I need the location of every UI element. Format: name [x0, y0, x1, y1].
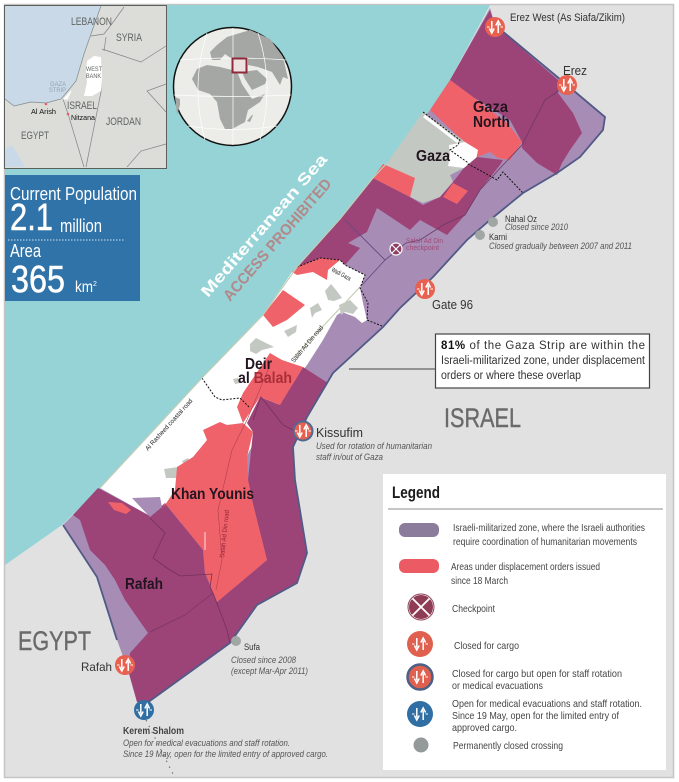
crossing: Kerem Shalom: Open for medical evacuations and staff rotation. [123, 738, 290, 748]
crossing: Karni [475, 230, 632, 251]
callout: 81 percent [436, 334, 650, 388]
panel background [5, 175, 140, 301]
sea: Mediterranean [5, 5, 490, 565]
crossing: Kerem Shalom: Since 19 May, open for the limited entry of approved cargo. [123, 749, 328, 759]
crossing: Kissufim: staff in/out of Gaza [316, 452, 383, 462]
crossing: Sufa: Sufa [244, 642, 260, 652]
legend item: permanently closed: Permanently closed crossing [453, 740, 563, 752]
line: coast edge [100, 163, 387, 488]
legend item: checkpoint [408, 594, 495, 620]
line: road Salah Ad Din [406, 90, 560, 243]
legend item: open for evacuations [407, 698, 642, 734]
inset borders [63, 7, 166, 167]
area: white band along Gaza boundary [424, 116, 458, 142]
crossing: Karni: Closed gradually between 2007 and 2011 [489, 241, 632, 251]
globe graticule [174, 28, 291, 145]
name: Gaza: Gaza [416, 148, 450, 165]
zone: overlap south [73, 367, 328, 703]
legend heading: Legend [392, 483, 440, 502]
inset coast [5, 6, 101, 106]
legend rule [388, 508, 663, 510]
line: west border fence [63, 525, 117, 640]
inset towns: Al Arish [31, 107, 56, 116]
crossing: Karni: Karni [489, 232, 507, 242]
inset labels: EGYPT [21, 130, 49, 142]
country label: Israel: ISRAEL [444, 403, 521, 433]
area figures: 365 [11, 259, 65, 301]
globe locator [174, 28, 292, 146]
line: governorate dashed boundaries [202, 112, 523, 408]
legend item: displacement orders [399, 559, 600, 587]
inset labels: LEBANON [71, 16, 112, 28]
crossing: Erez West [485, 12, 625, 37]
legend item: closed for cargo, open for staff [408, 664, 622, 692]
legend item: open for evacuations: Since 19 May, open for the limited entry of [452, 710, 619, 722]
checkpoint: Salah Ad Din: Salah Ad Din [406, 238, 443, 245]
globe land [175, 30, 288, 129]
crossing: Rafah: Rafah [81, 660, 112, 674]
checkpoint: Salah Ad Din: checkpoint [406, 245, 439, 252]
divider [8, 239, 125, 241]
zone: displacement Deir al Balah north [263, 290, 305, 327]
line: central governorate boundary [253, 397, 293, 430]
crossing: Kissufim: Used for rotation of humanitarian [316, 441, 432, 451]
zone: displacement Khan Younis and Deir al Balah [163, 353, 303, 602]
inset lower sea [5, 145, 25, 167]
dotted leader: Kerem Shalom [146, 720, 174, 776]
legend item: checkpoint: Checkpoint [452, 603, 495, 615]
road: Al Rasheed: Al Rasheed coastal road [144, 398, 195, 452]
inset labels [21, 16, 143, 142]
inset labels: JORDAN [106, 116, 141, 128]
inset towns [31, 103, 96, 122]
name: Gaza North: Gaza [473, 99, 508, 116]
road labels [144, 267, 352, 558]
governorate names [125, 99, 510, 593]
zone: Israeli-militarized base [63, 8, 605, 703]
crossing: Erez West: Erez West (As Siafa/Zikim) [510, 12, 625, 24]
road: Wadi Gaza: Wadi Gaza [330, 267, 352, 283]
crossing: Rafah [81, 655, 135, 675]
zone: displacement north [430, 80, 522, 160]
inset land [4, 6, 166, 168]
inset label: Gaza Strip: GAZA [50, 81, 67, 88]
inset map [4, 6, 166, 168]
callout leader [349, 368, 435, 370]
inset labels: ISRAEL [67, 100, 97, 112]
checkpoint: Salah Ad Din [390, 238, 443, 255]
name: Khan Younis: Khan Younis [171, 486, 254, 503]
crossing: Nahal Oz [488, 214, 568, 232]
road: beige Salah Ad Din segment [293, 287, 360, 358]
legend item: displacement orders: Areas under displacement orders issued [451, 561, 600, 573]
road: Salah Ad Din south: Salah Ad Din road [219, 509, 231, 558]
crossing: Kerem Shalom: Kerem Shalom [123, 725, 184, 737]
country label: Egypt: EGYPT [18, 626, 91, 656]
inset labels: WEST [86, 66, 102, 73]
West Bank shape [84, 56, 102, 96]
panel: population and area [5, 175, 140, 301]
legend item: closed for cargo, open for staff: or medical evacuations [452, 680, 543, 692]
area figures [10, 241, 97, 301]
line: Rafah lower boundary [150, 593, 213, 632]
inset label: Gaza Strip: STRIP [49, 87, 66, 94]
population figures: million [60, 216, 102, 236]
callout: 81 percent: orders or where these overlap [441, 370, 581, 382]
zone: displacement Deir al Balah top [292, 258, 340, 280]
label: access prohibited: ACCESS PROHIBITED [220, 176, 335, 305]
area figures: 2 [93, 281, 97, 288]
line: governorate boundaries south [150, 518, 230, 643]
crossing: Kissufim [294, 422, 432, 462]
globe locator box [232, 58, 246, 72]
legend item: displacement orders: since 18 March [451, 575, 508, 587]
line: purple zone internal roads [345, 220, 385, 285]
label: Mediterranean Sea: Mediterranean Sea [198, 151, 331, 301]
globe disc [174, 28, 292, 146]
map: Gaza Strip [63, 8, 605, 703]
inset towns: Nitzana [71, 113, 96, 122]
zone: purple patch by Khan Younis [132, 497, 162, 517]
zone: overlap central north [297, 157, 503, 267]
inset sea [5, 6, 101, 106]
zone: displacement south of Gaza city [443, 183, 468, 204]
area figures: km [75, 279, 93, 296]
area: white central zone [100, 260, 367, 530]
mark: white sliver in Khan Younis [204, 532, 206, 550]
crossing: Sufa: Closed since 2008 [231, 655, 296, 665]
crossing: Erez: Erez [563, 63, 587, 78]
area: white patch near Gaza city [448, 142, 478, 168]
panel: legend [383, 474, 666, 770]
inset label: Gaza Strip [49, 81, 67, 94]
name: Gaza North: North [473, 114, 510, 131]
line: border fence [147, 25, 605, 703]
crossing: Sufa: (except Mar-Apr 2011) [231, 666, 308, 676]
legend item: permanently closed [414, 738, 563, 752]
inset labels: SYRIA [116, 32, 143, 44]
area figures: Area [10, 241, 42, 261]
crossing: Nahal Oz: Closed since 2010 [505, 222, 568, 232]
name: Rafah: Rafah [125, 576, 163, 593]
area: Gaza city built-up [383, 112, 475, 203]
legend item: closed for cargo: Closed for cargo [454, 640, 519, 652]
population figures: Current Population [10, 184, 137, 204]
crossing: Kerem Shalom [123, 700, 328, 759]
zone: displacement Rafah sliver [108, 502, 131, 514]
population figures [10, 184, 137, 239]
name: Gaza North [473, 99, 510, 131]
inset labels: BANK [86, 73, 102, 80]
crossing: Erez [557, 63, 587, 95]
legend item: closed for cargo [407, 631, 519, 657]
inset Gaza Strip mark [64, 91, 71, 99]
name: Deir al Balah: Deir [245, 356, 272, 373]
legend item: militarized zone [399, 522, 645, 548]
crossing: Nahal Oz: Nahal Oz [505, 214, 537, 224]
population figures: 2.1 [10, 197, 53, 239]
crossing: Sufa [231, 636, 308, 676]
zone: displacement beside Gaza city [373, 164, 415, 197]
crossing: Kissufim: Kissufim [316, 425, 363, 440]
line: purple zone road two [385, 243, 406, 260]
legend item: open for evacuations: Open for medical evacuations and staff rotation. [452, 698, 642, 710]
callout: 81 percent: 81% of the Gaza Strip are within the [441, 340, 645, 352]
name: Deir al Balah: al Balah [238, 370, 292, 387]
road: Salah Ad Din north: Salah Ad Din road [290, 324, 325, 364]
legend background [383, 474, 666, 770]
crossing: Gate 96: Gate 96 [432, 297, 473, 312]
legend item: open for evacuations: approved cargo. [452, 722, 517, 734]
callout: 81 percent: Israeli-militarized zone, under displacement [441, 355, 646, 367]
legend item: closed for cargo, open for staff: Closed for cargo but open for staff rotation [452, 668, 622, 680]
areas: built-up grey patches [164, 284, 358, 478]
line: internal road south [216, 365, 270, 590]
zone: overlap north [450, 10, 582, 175]
crossing: Gate 96 [415, 279, 473, 312]
name: Deir al Balah [238, 356, 292, 387]
legend item: militarized zone: require coordination of humanitarian movements [453, 536, 637, 548]
